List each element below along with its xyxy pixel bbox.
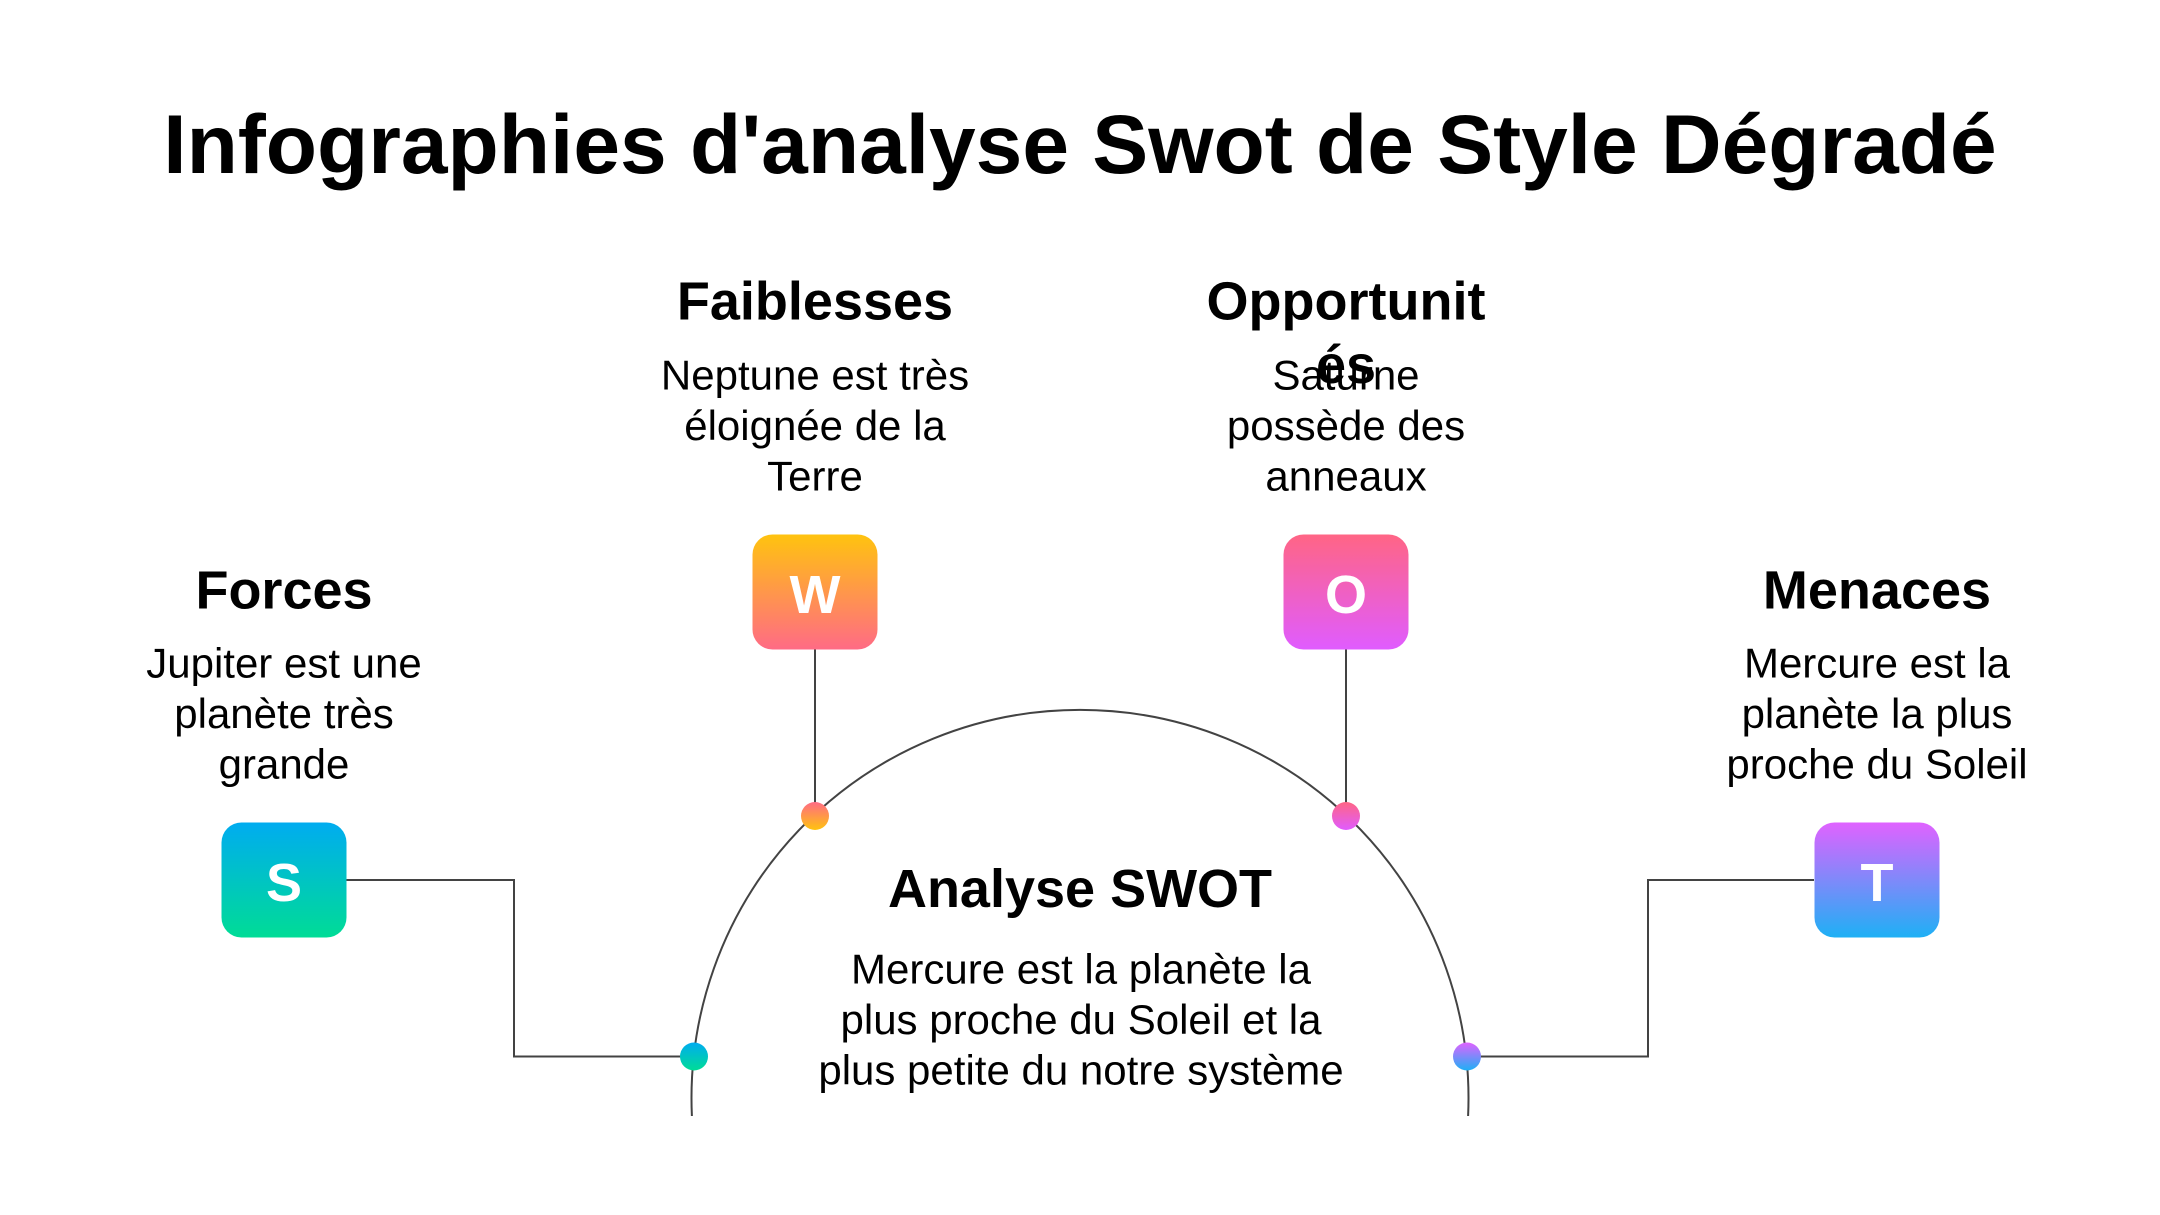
- text: Faiblesses description: Neptune est très: [661, 351, 969, 398]
- text: Opportunités description: anneaux: [1265, 453, 1427, 500]
- text: Opportunités description: possède des: [1227, 402, 1465, 449]
- panel: Opportunités: [1207, 272, 1485, 830]
- icon: S: S: [266, 853, 302, 913]
- heading: Analyse SWOT: Analyse SWOT: [888, 859, 1272, 919]
- icon: W: W: [790, 565, 841, 625]
- text: Opportunités description: Saturne: [1272, 351, 1420, 398]
- icon: O: [1284, 534, 1408, 650]
- text: Menaces description: planète la plus: [1742, 690, 2012, 737]
- connector: S: [346, 880, 694, 1056]
- heading: Opportunités: és: [1316, 335, 1376, 395]
- text: Menaces description: Mercure est la: [1744, 639, 2011, 686]
- text: Forces description: grande: [219, 740, 349, 787]
- dot: O: [1332, 802, 1360, 830]
- icon: S: [222, 822, 346, 938]
- heading: Opportunités: Opportunit: [1207, 272, 1485, 332]
- connector: O: [1345, 649, 1347, 816]
- dot: T: [1453, 1042, 1481, 1070]
- dot: S: [680, 1042, 708, 1070]
- icon: O: O: [1325, 565, 1367, 625]
- panel: centre: [818, 859, 1344, 1093]
- connector: T: [1467, 880, 1814, 1056]
- heading: Menaces: Menaces: [1763, 560, 1991, 620]
- text: Menaces description: proche du Soleil: [1726, 740, 2028, 787]
- text: Forces description: Jupiter est une: [146, 639, 422, 686]
- heading: Forces: Forces: [195, 560, 373, 620]
- arc: central semicircle: [692, 710, 1468, 1116]
- text: Faiblesses description: Terre: [767, 453, 863, 500]
- panel: Menaces: [1453, 560, 2028, 1070]
- panel: Faiblesses: [661, 272, 969, 830]
- text: Faiblesses description: éloignée de la: [684, 402, 946, 449]
- title: Infographies d'analyse Swot de Style Dégradé: [163, 97, 1997, 191]
- connector: W: [814, 649, 816, 816]
- text: centre description: Mercure est la planète la: [851, 945, 1312, 992]
- text: centre description: plus petite du notre système: [818, 1046, 1344, 1093]
- panel: Forces: [146, 560, 708, 1070]
- dot: W: [801, 802, 829, 830]
- heading: Faiblesses: Faiblesses: [677, 272, 953, 332]
- text: Forces description: planète très: [174, 690, 394, 737]
- icon: W: [752, 534, 878, 650]
- icon: T: T: [1860, 853, 1894, 913]
- icon: T: [1814, 822, 1940, 938]
- text: centre description: plus proche du Soleil et la: [841, 996, 1322, 1043]
